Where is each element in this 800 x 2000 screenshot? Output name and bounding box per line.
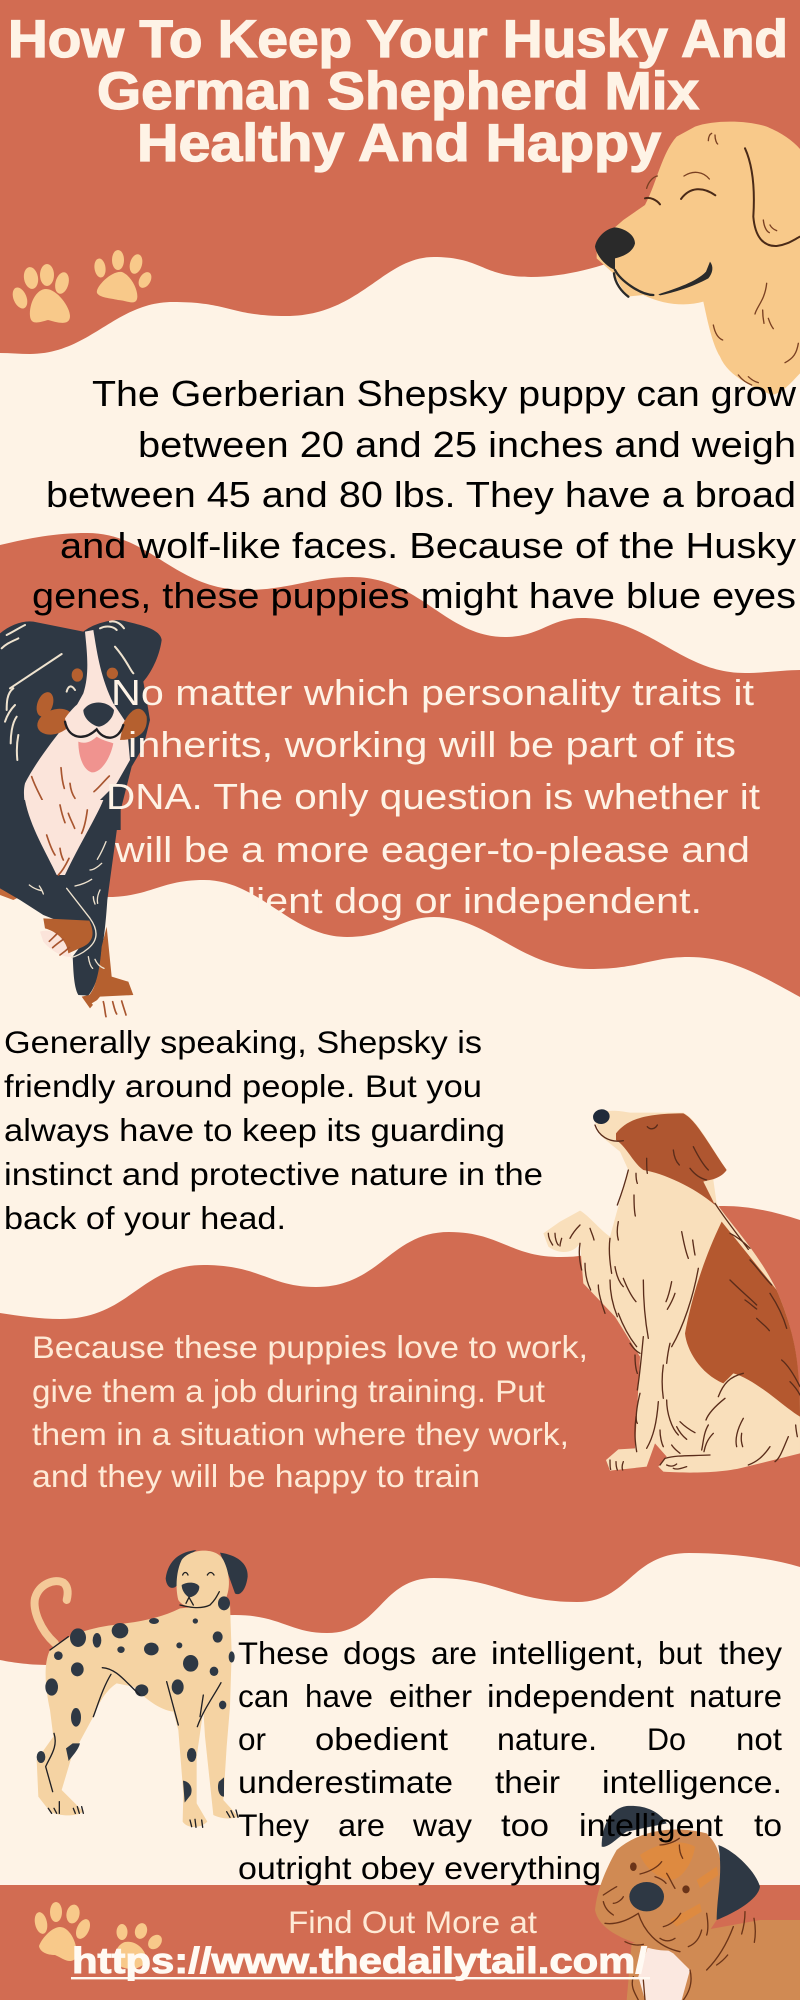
title: German Shepherd Mix xyxy=(97,62,700,121)
text block: intelligence: are xyxy=(431,1635,477,1671)
text block: personality: will be a more eager-to-please and xyxy=(114,829,750,870)
text block: intelligence: These xyxy=(238,1635,329,1671)
text block: size and looks xyxy=(32,373,797,616)
icon: sitting brown dog xyxy=(543,1108,800,1473)
text block: training: Because these puppies love to work, xyxy=(32,1329,588,1365)
text block: training: them in a situation where they work, xyxy=(32,1416,569,1452)
text block: training xyxy=(32,1329,588,1494)
text block: training: give them a job during training. Put xyxy=(32,1373,545,1409)
footer band xyxy=(0,1885,800,2000)
icon: golden dog xyxy=(595,122,800,395)
icon: footer paw right xyxy=(115,1922,165,1969)
icon: footer paw left xyxy=(33,1902,93,1961)
text block: intelligence: independent xyxy=(487,1678,674,1714)
icon: boxer dog xyxy=(595,1806,800,2000)
icon: bernese dog xyxy=(0,620,162,1017)
text block: intelligence: have xyxy=(305,1678,373,1714)
text block: intelligence: nature xyxy=(689,1678,782,1714)
text block: personality: DNA. The only question is whether it xyxy=(106,776,760,817)
text block: size and looks: between 45 and 80 lbs. They have a broad xyxy=(46,474,796,515)
text block: size and looks: between 20 and 25 inches and weigh xyxy=(138,424,796,465)
text block: friendly: friendly around people. But you xyxy=(4,1068,482,1104)
lower wave band xyxy=(0,1206,800,1665)
text block: intelligence: are xyxy=(338,1807,385,1843)
text block: intelligence: either xyxy=(389,1678,472,1714)
text block: intelligence: not xyxy=(736,1721,782,1757)
text block: intelligence: or xyxy=(238,1721,266,1757)
text block: intelligence: intelligent xyxy=(579,1807,723,1843)
text block: intelligence: intelligent, xyxy=(491,1635,644,1671)
text block: size and looks: and wolf-like faces. Because of the Husky xyxy=(60,525,796,566)
text block: personality: No matter which personality traits it xyxy=(111,672,754,713)
icon: paw print right xyxy=(93,250,154,302)
icon: paw print left xyxy=(10,264,71,323)
text block: intelligence: dogs xyxy=(343,1635,416,1671)
text block: intelligence: intelligence. xyxy=(602,1764,782,1800)
text block: friendly: instinct and protective nature in the xyxy=(4,1156,543,1192)
middle wave band xyxy=(0,533,800,997)
text block: intelligence: underestimate xyxy=(238,1764,453,1800)
text block: personality xyxy=(106,672,760,921)
text block: intelligence: their xyxy=(495,1764,560,1800)
icon: dalmatian xyxy=(35,1550,248,1827)
text block: training: and they will be happy to train xyxy=(32,1458,480,1494)
text block: intelligence: too xyxy=(501,1807,549,1843)
footer call to action: Find Out More at xyxy=(288,1904,537,1940)
text block: intelligence: obedient xyxy=(315,1721,448,1757)
text block: personality: inherits, working will be part of its xyxy=(128,724,736,765)
text block: intelligence: they xyxy=(719,1635,782,1671)
text block: size and looks: The Gerberian Shepsky puppy can grow xyxy=(92,373,797,414)
text block: intelligence: to xyxy=(754,1807,782,1843)
title: Healthy And Happy xyxy=(137,114,662,173)
text block: friendly xyxy=(4,1024,543,1236)
text block: intelligence: nature. xyxy=(497,1721,597,1757)
text block: size and looks: genes, these puppies might have blue eyes xyxy=(32,575,796,616)
text block: intelligence: Do xyxy=(647,1721,686,1757)
text block: intelligence: but xyxy=(658,1635,702,1671)
text block: personality: obedient dog or independent. xyxy=(164,880,702,921)
title xyxy=(8,10,788,173)
text block: friendly: back of your head. xyxy=(4,1200,286,1236)
text block: intelligence: They xyxy=(238,1807,309,1843)
text block: intelligence xyxy=(238,1635,782,1886)
text block: friendly: Generally speaking, Shepsky is xyxy=(4,1024,482,1060)
footer link: https://www.thedailytail.com/ xyxy=(72,1940,647,1981)
text block: friendly: always have to keep its guarding xyxy=(4,1112,505,1148)
text block: intelligence: outright obey everything xyxy=(238,1850,601,1886)
text block: intelligence: way xyxy=(412,1807,472,1843)
header wave band xyxy=(0,0,800,354)
text block: intelligence: can xyxy=(238,1678,289,1714)
title: How To Keep Your Husky And xyxy=(8,10,788,69)
